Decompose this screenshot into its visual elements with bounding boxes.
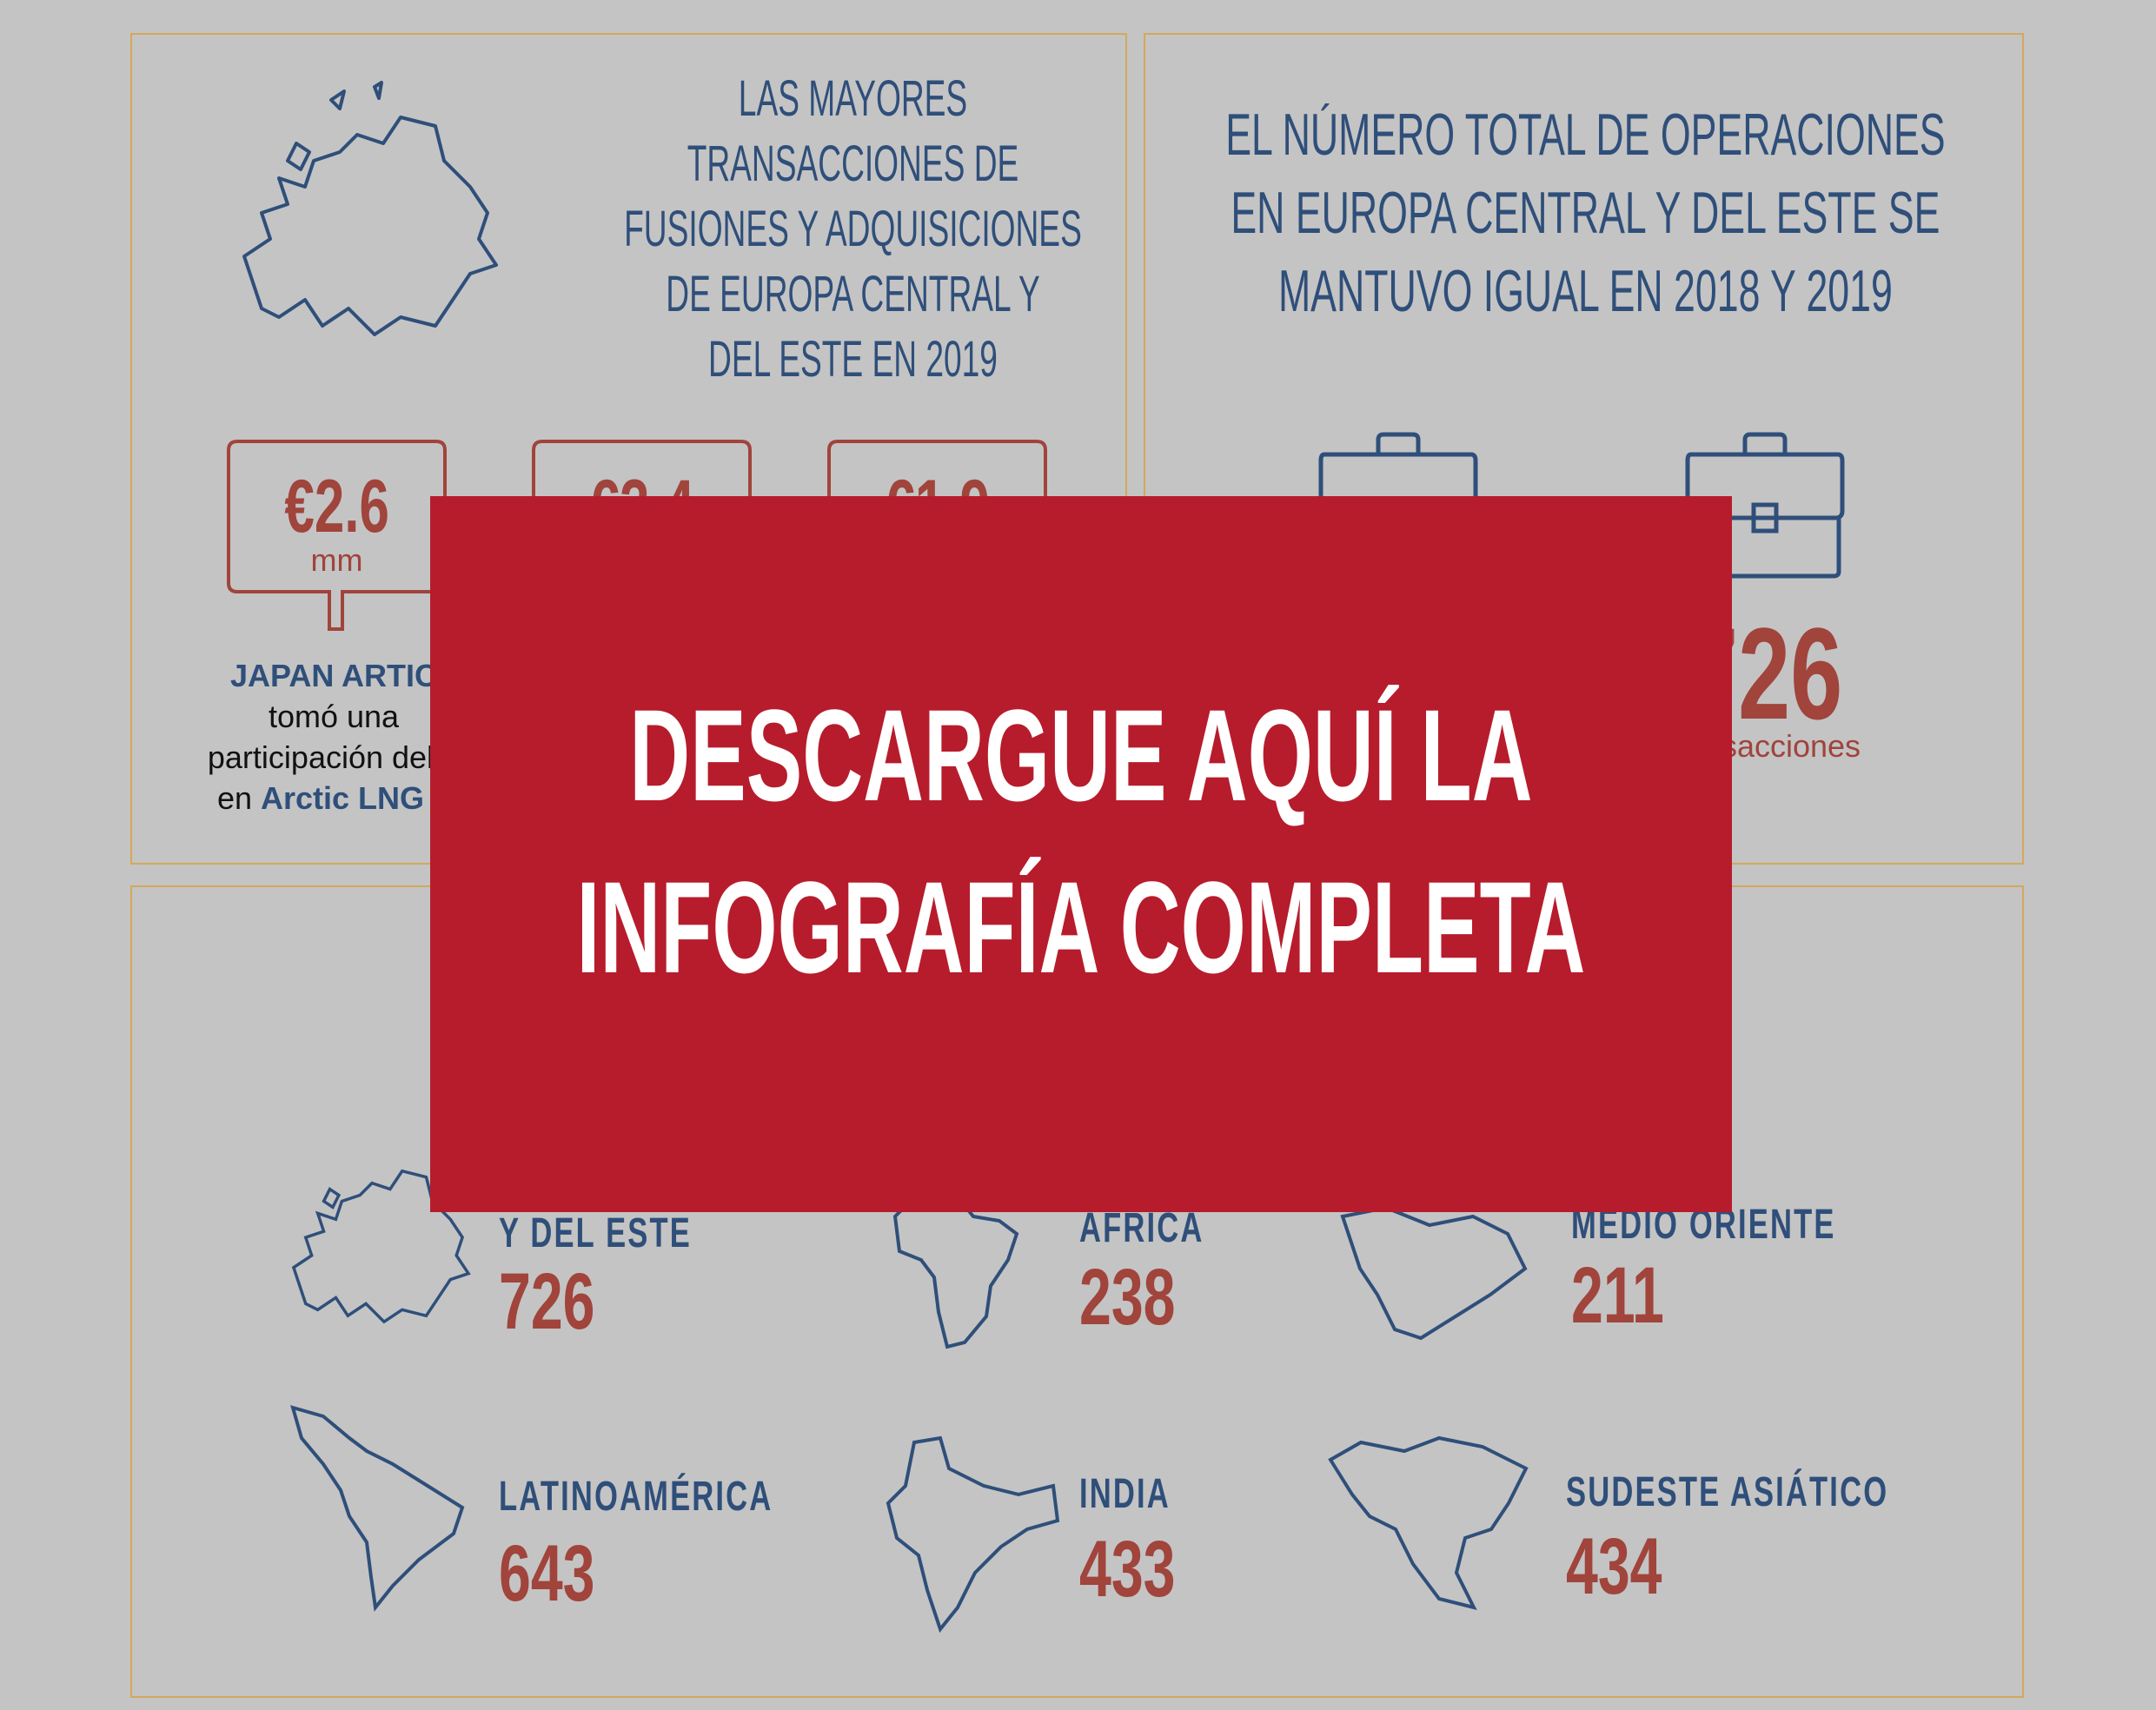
region: Africa: ÁFRICA xyxy=(1079,1205,1204,1251)
region: Europa central y del este: Y DEL ESTE xyxy=(499,1210,692,1256)
panel: regions xyxy=(130,885,2024,1698)
panel: total operations xyxy=(1144,33,2024,865)
region: Medio Oriente: MEDIO ORIENTE xyxy=(1571,1202,1836,1248)
text: Japan Arctic: tomó una xyxy=(269,699,399,734)
title: largest transactions xyxy=(624,70,1081,388)
text: Japan Arctic: JAPAN ARTIC xyxy=(230,658,437,693)
callout: 2.6 xyxy=(227,440,447,631)
stat: 726 operations: 726 xyxy=(1686,600,1842,746)
region: India: 433 xyxy=(1079,1525,1176,1614)
title: total operations: EL NÚMERO TOTAL DE OPERACIONES xyxy=(1225,102,1945,168)
region: India: INDIA xyxy=(1079,1471,1171,1517)
region: Europa central y del este xyxy=(292,1170,692,1346)
title: largest transactions: TRANSACCIONES DE xyxy=(687,136,1018,192)
text: Japan Arctic: participación del 1 xyxy=(208,739,460,775)
region: Latinoamerica xyxy=(290,1405,773,1618)
region: India xyxy=(886,1435,1176,1633)
region: Sudeste Asiatico: 434 xyxy=(1566,1522,1662,1611)
banner text: INFOGRAFÍA COMPLETA xyxy=(577,854,1585,1000)
icon: europe map top xyxy=(242,80,499,337)
title: total operations: MANTUVO IGUAL EN 2018 Y 2019 xyxy=(1278,258,1892,324)
banner text: DESCARGUE AQUÍ LA xyxy=(629,682,1533,828)
region: Medio Oriente: 211 xyxy=(1571,1251,1664,1340)
region: Sudeste Asiatico xyxy=(1328,1435,1888,1611)
icon: briefcase 2 xyxy=(1686,433,1844,579)
callout: download banner xyxy=(430,496,1732,1212)
text: Japan Arctic xyxy=(208,658,460,816)
title: total operations xyxy=(1225,102,1945,324)
callout: 2.6: €2.6 xyxy=(284,465,389,548)
region: Sudeste Asiatico: SUDESTE ASIÁTICO xyxy=(1566,1469,1888,1515)
region: Latinoamerica: LATINOAMÉRICA xyxy=(499,1474,773,1520)
region: Africa xyxy=(893,1205,1204,1349)
icon: briefcase 1 xyxy=(1319,433,1477,496)
callout: 2.4: €2.4 xyxy=(589,465,694,548)
callout: 1.9 xyxy=(827,440,1047,548)
title: largest transactions: DE EUROPA CENTRAL Y xyxy=(666,266,1039,322)
stat: 726 operations: transacciones xyxy=(1668,728,1861,764)
callout: 2.6: mm xyxy=(311,542,362,578)
callout: 1.9: €1.9 xyxy=(885,465,990,548)
region: Latinoamerica: 643 xyxy=(499,1529,595,1618)
title: largest transactions: FUSIONES Y ADQUISICIONES xyxy=(624,201,1081,257)
title: total operations: EN EUROPA CENTRAL Y DEL ESTE SE xyxy=(1231,180,1940,246)
text: Japan Arctic: en Arctic LNG 2 xyxy=(217,780,450,816)
title: largest transactions: DEL ESTE EN 2019 xyxy=(708,331,997,388)
region: Europa central y del este: 726 xyxy=(499,1257,595,1346)
region: Africa: 238 xyxy=(1079,1253,1176,1342)
callout: 2.4 xyxy=(532,440,752,548)
title: largest transactions: LAS MAYORES xyxy=(738,70,967,127)
region: Medio Oriente xyxy=(1340,1202,1836,1340)
banner text xyxy=(577,682,1585,1000)
panel: largest transactions xyxy=(130,33,1127,865)
